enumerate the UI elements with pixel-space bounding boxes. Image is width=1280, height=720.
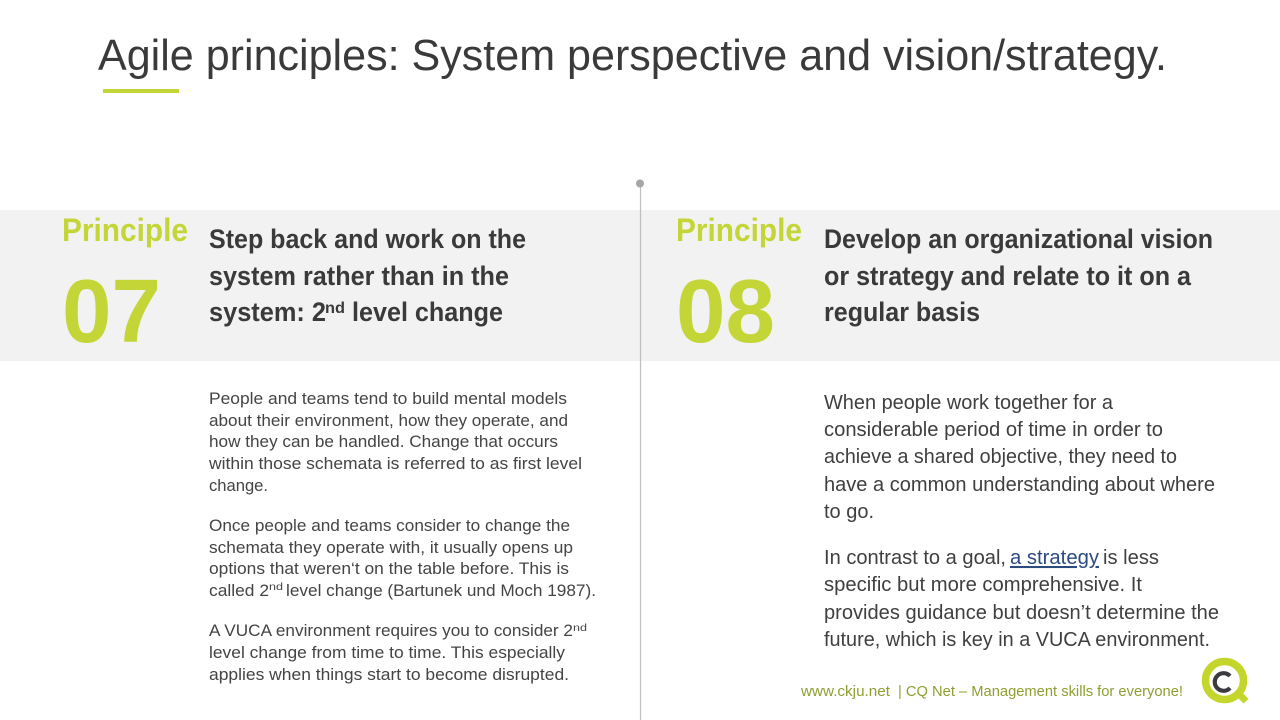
principle 08 number: 08 (676, 262, 775, 362)
panel: header band (0, 210, 1280, 361)
principle 07 body text: applies when things start to become disrupted. (209, 666, 569, 684)
principle 08 heading: or strategy and relate to it on a (824, 261, 1192, 291)
principle 08 body text: considerable period of time in order to (824, 418, 1163, 441)
principle 07 body text: People and teams tend to build mental models (209, 390, 567, 408)
principle 07 body text: schemata they operate with, it usually opens up (209, 539, 573, 557)
principle 08 heading: regular basis (824, 297, 980, 327)
principle 08 body text: future, which is key in a VUCA environment. (824, 628, 1210, 651)
footer text: www.ckju.net (800, 683, 891, 700)
principle 08 body text: specific but more comprehensive. It (824, 573, 1142, 596)
center divider line (636, 180, 644, 720)
principle 08 body text: a strategy (1010, 546, 1100, 569)
principle 08 label: Principle (676, 212, 802, 248)
principle 07 heading: system: 2 (209, 297, 326, 327)
icon: CQ logo (1206, 662, 1248, 704)
principle 07 body text: change. (209, 477, 268, 495)
panel: principle 08 (676, 212, 1219, 651)
panel: principle 07 (62, 212, 596, 684)
principle 08 body text: have a common understanding about where (824, 473, 1215, 496)
principle 07 body text: level change from time to time. This especially (209, 644, 566, 662)
principle 07 heading: system rather than in the (209, 261, 509, 291)
principle 07 body text: Once people and teams consider to change the (209, 517, 570, 535)
principle 07 body text: nd (269, 581, 283, 593)
principle 07 label: Principle (62, 212, 188, 248)
principle 07 body text (208, 390, 596, 684)
principle 07 body text: called 2 (209, 582, 269, 600)
principle 08 body text: to go. (824, 500, 874, 523)
principle 08 body text: is less (1103, 546, 1159, 569)
principle 08 body text: When people work together for a (824, 391, 1114, 414)
principle 07 heading: Step back and work on the (209, 224, 526, 254)
principle 08 body text: provides guidance but doesn’t determine the (824, 601, 1219, 624)
principle 08 body text (824, 391, 1219, 651)
principle 07 heading: nd (325, 300, 345, 317)
principle 07 heading (209, 224, 526, 327)
footer text: | CQ Net – Management skills for everyone! (898, 683, 1183, 700)
principle 08 heading: Develop an organizational vision (824, 224, 1213, 254)
principle 08 heading (824, 224, 1213, 327)
principle 07 body text: within those schemata is referred to as first level (208, 455, 582, 473)
principle 07 body text: options that weren‘t on the table before. This is (209, 560, 569, 578)
principle 08 body text: achieve a shared objective, they need to (824, 445, 1177, 468)
principle 08 body text: In contrast to a goal, (824, 546, 1006, 569)
principle 07 body text: about their environment, how they operate, and (209, 412, 568, 430)
principle 07 body text: nd (573, 622, 587, 634)
principle 07 body text: level change (Bartunek und Moch 1987). (286, 582, 596, 600)
principle 07 body text: A VUCA environment requires you to consider 2 (209, 622, 573, 640)
principle 07 body text: how they can be handled. Change that occurs (209, 433, 558, 451)
title: Agile principles: System perspective and vision/strategy. (98, 31, 1167, 80)
principle 07 heading: level change (352, 297, 503, 327)
principle 07 number: 07 (62, 262, 161, 362)
